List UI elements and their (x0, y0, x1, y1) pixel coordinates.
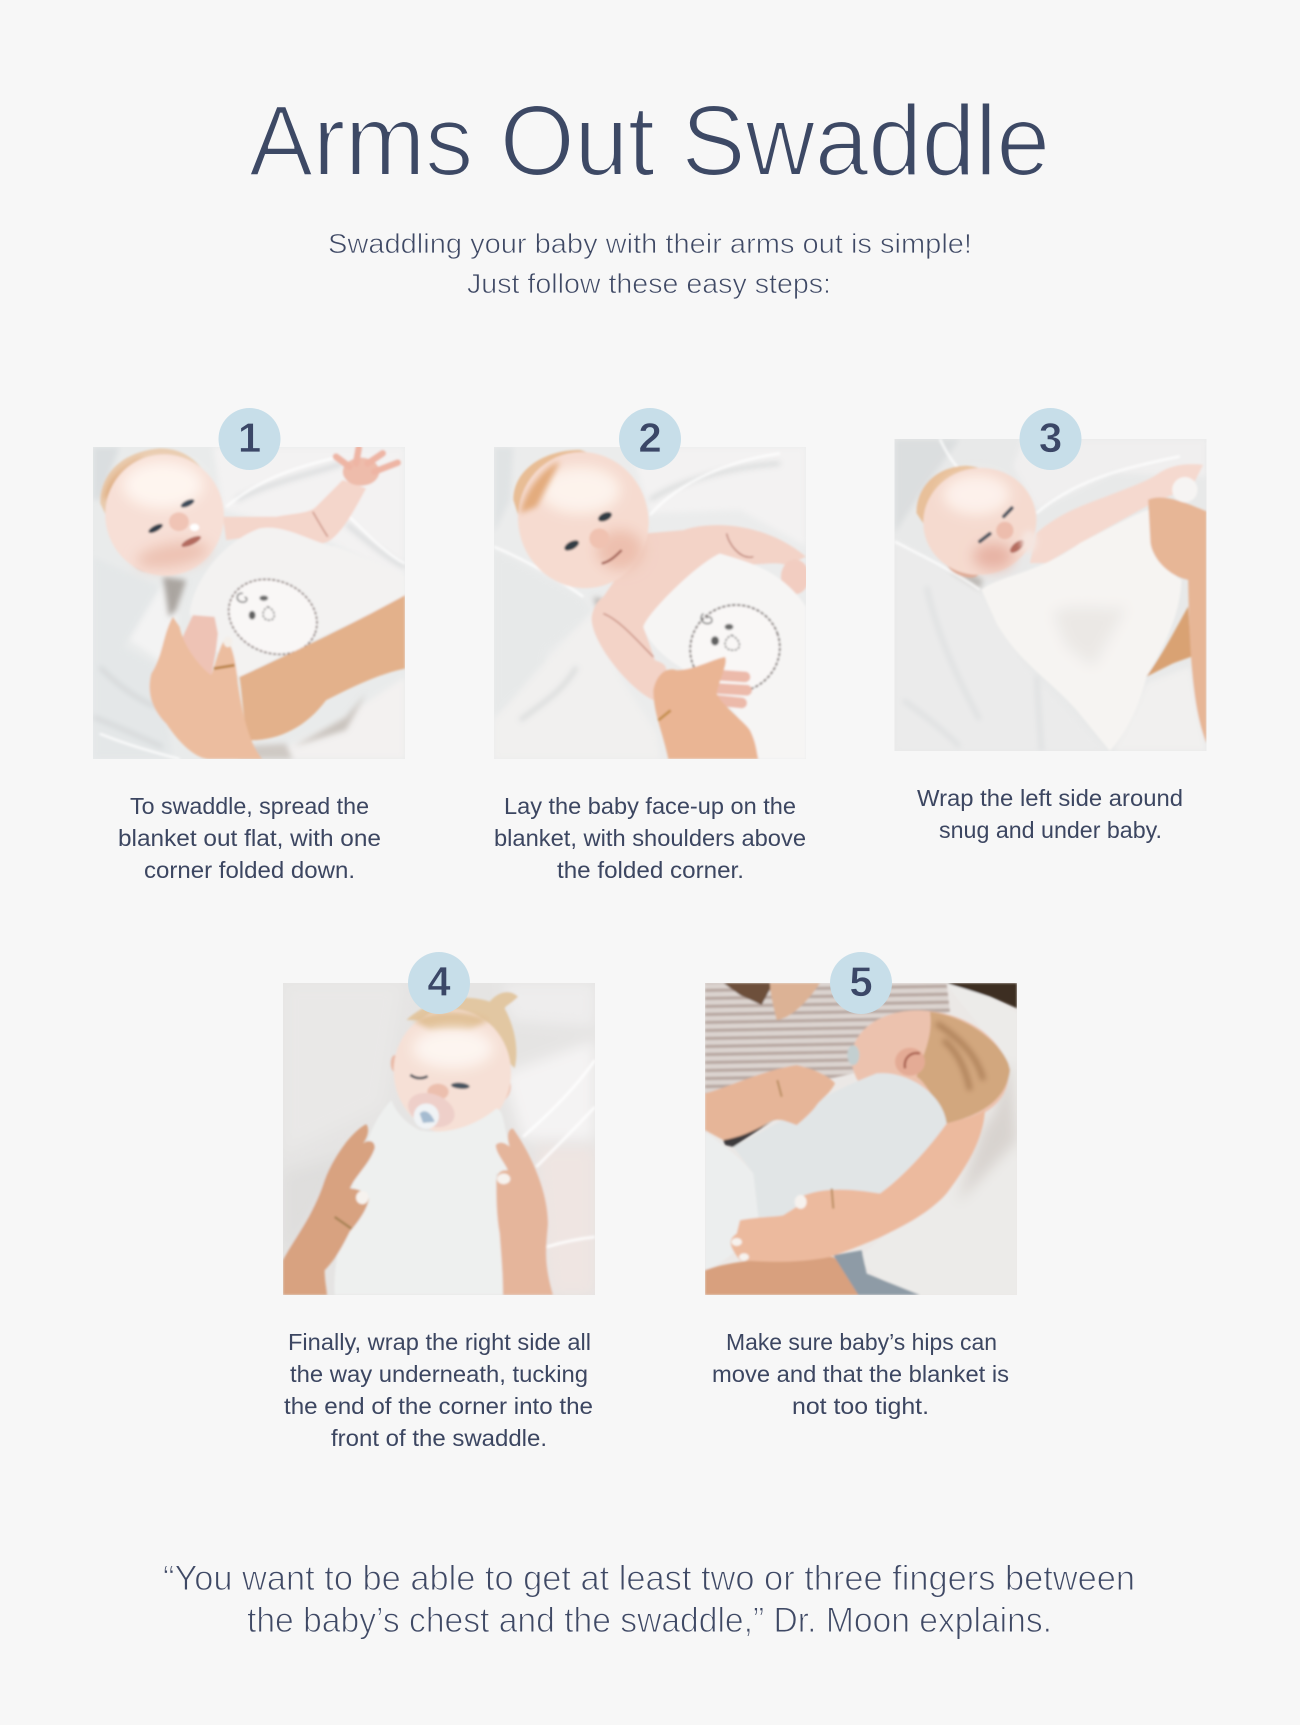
striped shirt (705, 983, 950, 1093)
adult arm and hand (1146, 477, 1206, 743)
photo: swaddled baby with pacifier between two hands (283, 983, 595, 1295)
caption 4: Finally, wrap the right side all (288, 1329, 591, 1355)
upper hand (705, 1065, 835, 1147)
number badge 4 (408, 952, 470, 1014)
caption 1 (118, 793, 381, 883)
lower arm and hand (731, 1110, 985, 1262)
number badge 2: 2 (638, 414, 662, 461)
baby body (592, 525, 809, 700)
baby head (841, 996, 1019, 1137)
caption 2: blanket, with shoulders above (494, 825, 806, 851)
caption 3: snug and under baby. (939, 817, 1162, 843)
panel: step 3 (894, 408, 1206, 843)
number badge 5 (830, 952, 892, 1014)
caption 4 (284, 1329, 593, 1451)
photo: baby on blanket with arm raised (93, 447, 405, 759)
number badge 1 (218, 408, 280, 470)
adult left hand (283, 1124, 375, 1295)
number badge 4: 4 (427, 958, 451, 1005)
baby head (500, 435, 666, 605)
adult hand (653, 657, 758, 759)
caption 5: Make sure baby’s hips can (726, 1329, 997, 1355)
title: Arms Out Swaddle (249, 85, 1050, 197)
panel: step 4 (283, 952, 595, 1451)
subtitle: Swaddling your baby with their arms out is simple! (328, 228, 972, 259)
caption 1: To swaddle, spread the (130, 793, 369, 819)
caption 3: Wrap the left side around (917, 785, 1183, 811)
quote (163, 1559, 1135, 1640)
caption 2: Lay the baby face-up on the (504, 793, 796, 819)
number badge 1: 1 (238, 414, 261, 461)
caption 4: the way underneath, tucking (290, 1361, 588, 1387)
caption 4: the end of the corner into the (284, 1393, 593, 1419)
caption 5: move and that the blanket is (712, 1361, 1009, 1387)
panel: step 1 (92, 408, 405, 883)
swaddle blanket (705, 1073, 947, 1270)
caption 4: front of the swaddle. (331, 1425, 547, 1451)
caption 2: the folded corner. (557, 857, 744, 883)
panel: step 2 (494, 408, 809, 883)
baby head (92, 441, 238, 589)
caption 5 (712, 1329, 1009, 1419)
number badge 5: 5 (849, 958, 873, 1005)
number badge 2 (619, 408, 681, 470)
caption 5: not too tight. (792, 1393, 929, 1419)
swaddle blanket (982, 510, 1182, 751)
pacifier (403, 1087, 459, 1133)
number badge 3: 3 (1039, 414, 1062, 461)
baby head (915, 459, 1045, 584)
quote: “You want to be able to get at least two or three fingers between (163, 1559, 1135, 1598)
thigh (705, 1257, 858, 1295)
caption 2 (494, 793, 806, 883)
swaddle blanket (334, 1100, 512, 1295)
baby head (387, 992, 518, 1140)
blanket with face (190, 528, 405, 677)
caption 1: corner folded down. (144, 857, 355, 883)
number badge 3 (1020, 408, 1082, 470)
caption 3 (917, 785, 1183, 843)
blanket with face (643, 553, 806, 759)
photo: wrapping the left side of the blanket (894, 439, 1206, 751)
subtitle (328, 228, 972, 299)
adult right hand (496, 1128, 553, 1295)
baby arm (1030, 464, 1203, 563)
quote: the baby’s chest and the swaddle,” Dr. Moon explains. (247, 1601, 1052, 1640)
jeans (833, 1250, 920, 1295)
panel: step 5 (705, 952, 1019, 1419)
adult arm (240, 595, 405, 740)
adult hand (150, 615, 262, 759)
baby arm and hand (223, 448, 398, 545)
photo: baby lying face-up with blanket on tummy (494, 447, 806, 759)
photo: parent holding swaddled baby (705, 983, 1017, 1295)
subtitle: Just follow these easy steps: (467, 268, 831, 299)
caption 1: blanket out flat, with one (118, 825, 381, 851)
